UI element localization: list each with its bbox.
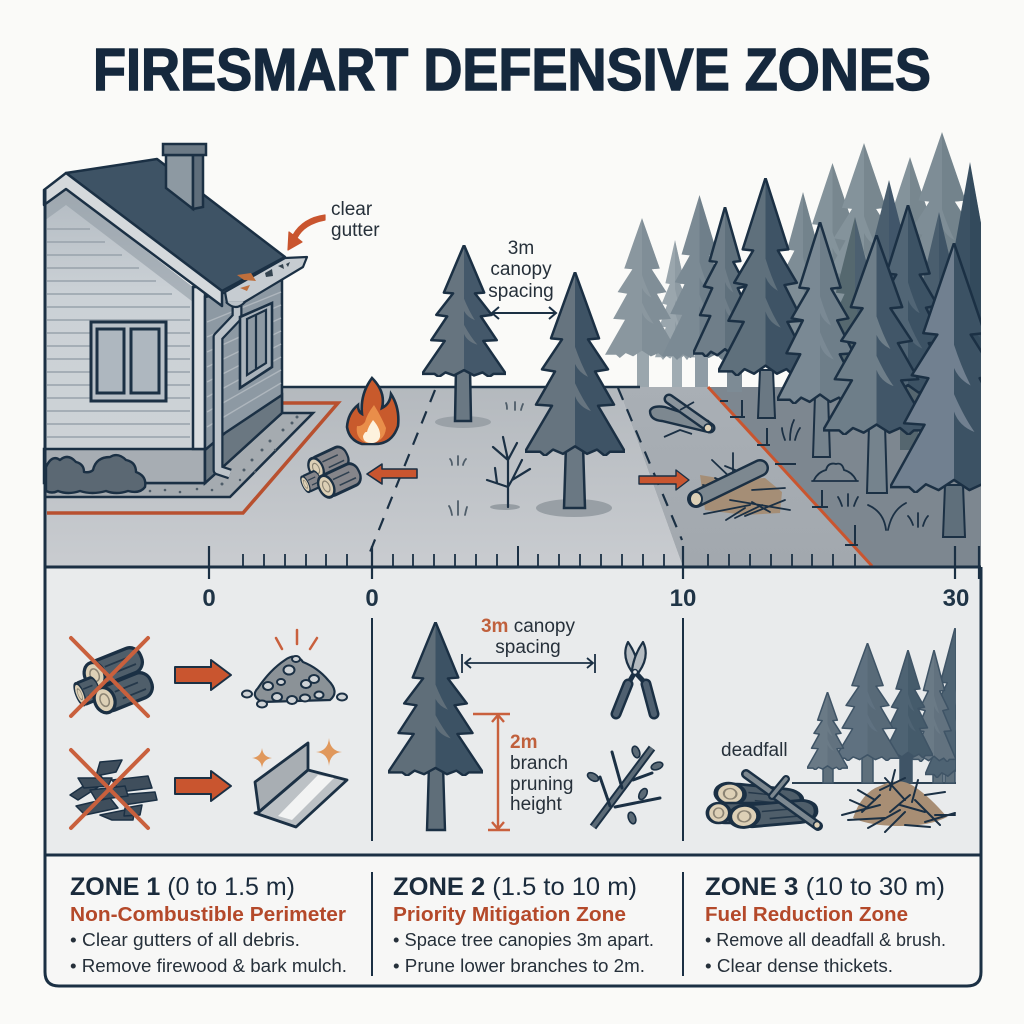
zone 3 text: Fuel Reduction Zone [705,904,908,926]
slash pile with log [690,453,790,520]
zone 3 text: ZONE 3 (10 to 30 m) [705,873,945,901]
double arrow [492,307,556,319]
boundary tick marks [720,400,858,545]
spaced tree 2 [525,272,625,517]
shrubs [46,455,145,493]
icon: firewood stack [299,444,364,500]
ruler labels: 0 [365,585,379,612]
front foundation [44,449,205,483]
branch pruning height: height [510,794,562,815]
callout: clear gutter: clear [331,199,373,220]
zone 3 icon: deadfall logs [707,774,820,829]
zone 1 icon: firewood crossed out [71,638,156,716]
callout: 3m canopy spacing [488,238,556,319]
ruler labels [202,585,969,612]
gutter with debris [225,257,307,303]
front wall [44,189,193,450]
zone 1 icon: metal flashing [252,738,347,827]
arrow: move firewood away [367,464,417,484]
zone 2 text: • Space tree canopies 3m apart. [393,929,654,950]
zone 1 text: • Remove firewood & bark mulch. [70,955,347,976]
icon: pruned branch [586,745,664,827]
callout: 3m canopy spacing: spacing [488,281,554,302]
downspout [218,306,237,474]
ruler labels: 10 [670,585,696,612]
panel: zone text [45,855,981,986]
zone 3 red boundary [708,387,872,566]
outlined tree 4 [693,207,745,357]
side foundation [205,395,282,483]
ruler [45,546,981,579]
ground zone 1 and 2 [44,387,683,567]
branch pruning height: 2m [510,732,537,753]
icon: pruners [616,642,654,714]
outlined tree 6 [777,222,852,458]
spaced tree 1 [422,245,506,428]
siding lines [47,229,190,437]
sparkles [252,748,272,768]
title: FIRESMART DEFENSIVE ZONES [93,37,931,103]
zone 2 text: • Prune lower branches to 2m. [393,955,645,976]
zone 2 text: ZONE 2 (1.5 to 10 m) [393,873,637,901]
zone 3 scene: grass and shrub [782,420,928,530]
canopy spacing label: spacing [495,637,561,658]
canopy spacing label: 3m canopy [481,616,576,637]
outlined tree 7 [823,235,930,493]
branch pruning height: pruning [510,774,573,795]
callout: 3m canopy spacing: canopy [490,259,552,280]
canopy spacing label [462,616,595,673]
arrow [175,771,231,801]
branch pruning height [473,714,573,830]
ruler labels: 30 [943,585,969,612]
foreground forest [693,178,1018,537]
outlined tree 9 [888,205,935,450]
ground: scene base [44,387,981,567]
deadfall label: deadfall [721,740,788,761]
zone 2 text [393,873,654,976]
panel: lower illustrations [45,567,981,855]
gravel strip [45,413,313,497]
ruler labels: 0 [202,585,216,612]
arrow [175,660,231,690]
chimney [163,144,206,209]
zone 2 text: Priority Mitigation Zone [393,904,626,926]
ground outer forest floor [708,387,981,567]
zone 2 tree with dimension lines [388,622,483,830]
zone 3 text: • Remove all deadfall & brush. [705,929,946,950]
corner strip [193,287,205,449]
zone boundary dashes [370,390,435,552]
callout: clear gutter [288,199,380,250]
outlined tree 5 [718,178,801,419]
icon: flame [347,378,398,444]
deadfall logs in zone 3 [650,399,712,437]
zone 1 icon: bark mulch crossed out [70,750,157,828]
branch pruning height: branch [510,753,568,774]
left frame edge [44,190,46,567]
zone 3 icon: brush pile [842,770,955,832]
side siding [207,292,281,427]
zone 3 text: • Clear dense thickets. [705,955,893,976]
outlined tree 8 [890,243,981,538]
gable shadow [44,189,193,302]
zone 3 text [705,873,946,976]
house [44,144,307,567]
side window [240,303,272,388]
frame and dividers [45,567,981,986]
fascia band [44,173,222,306]
icon: curved arrow to gutter [288,215,325,250]
callout: clear gutter: gutter [331,220,380,241]
ground zone 3 [618,387,872,567]
grass tufts and sapling [449,402,530,515]
roof [66,159,285,291]
arrow: clear fuel [639,470,689,490]
perimeter red boundary [47,403,338,513]
callout: 3m canopy spacing: 3m [508,238,534,259]
zone 3 icon: forest [792,628,956,784]
zone 1 text: • Clear gutters of all debris. [70,929,300,950]
zone 1 text: ZONE 1 (0 to 1.5 m) [70,873,295,901]
zone 1 text: Non-Combustible Perimeter [70,904,346,926]
zone 1 text [70,873,347,976]
front window [91,322,166,401]
zone 1 icon: gravel pile [242,630,347,708]
background forest silhouettes [605,132,981,387]
side wall [205,280,282,483]
